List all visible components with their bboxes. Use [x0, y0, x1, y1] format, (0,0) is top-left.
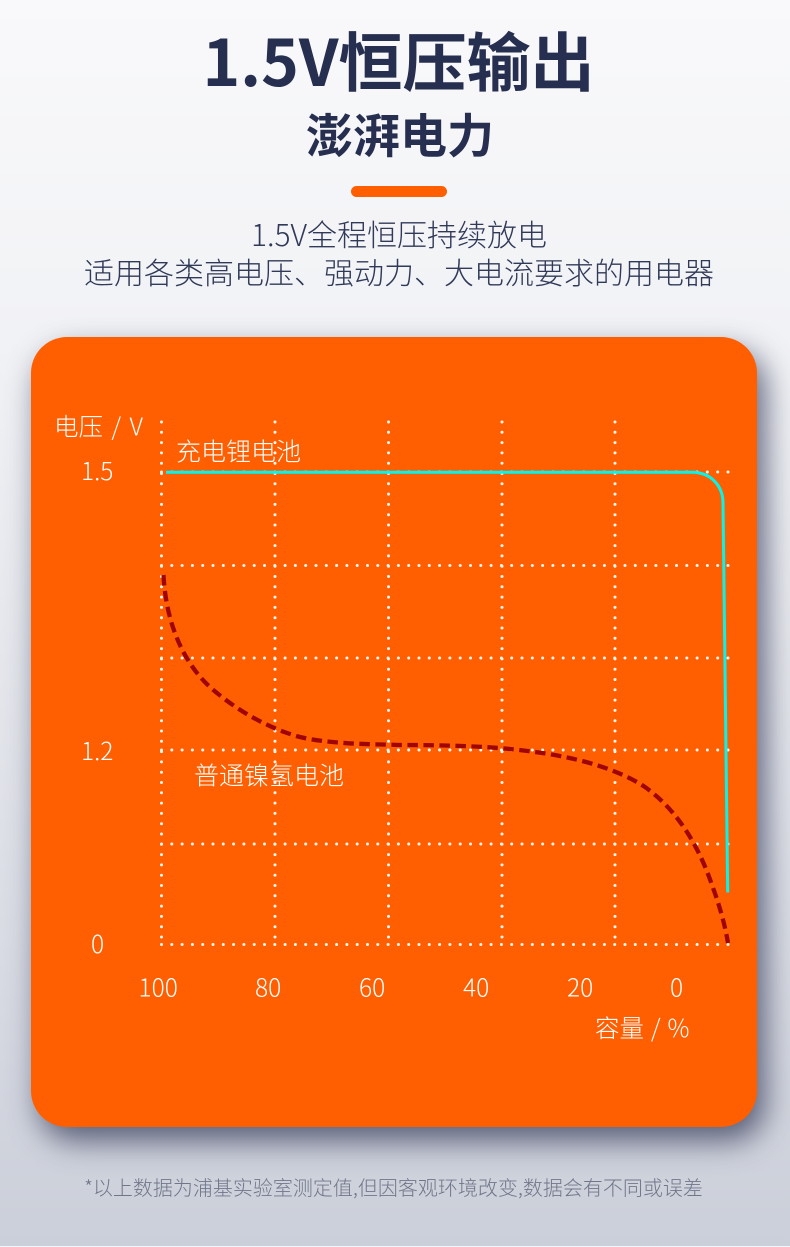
y axis labels: 1.5	[81, 453, 113, 488]
subtitle: 澎湃电力	[306, 98, 494, 166]
x axis labels: 80	[255, 970, 281, 1004]
y axis labels: 1.2	[81, 733, 113, 768]
bottom edge	[0, 1246, 790, 1247]
x axis title: 容量 / %	[595, 1010, 689, 1045]
y axis title: 电压 / V	[54, 408, 143, 444]
description text: 适用各类高电压、强动力、大电流要求的用电器	[84, 248, 714, 292]
x axis labels: 60	[359, 970, 385, 1004]
footnote: *以上数据为浦基实验室测定值,但因客观环境改变,数据会有不同或误差	[84, 1172, 703, 1201]
y axis labels	[81, 453, 113, 961]
accent bar	[351, 186, 447, 197]
x axis labels	[138, 970, 683, 1004]
x axis labels: 100	[138, 970, 178, 1004]
lithium curve	[166, 472, 728, 892]
title: 1.5V恒压输出	[203, 13, 594, 105]
x axis labels: 20	[567, 970, 593, 1004]
lithium label: 充电锂电池	[176, 432, 301, 468]
y axis labels: 0	[91, 926, 104, 961]
description text: 1.5V全程恒压持续放电	[251, 210, 547, 254]
x axis labels: 0	[670, 970, 683, 1004]
NiMH label: 普通镍氢电池	[194, 756, 344, 792]
x axis labels: 40	[463, 970, 489, 1004]
description text	[84, 210, 714, 292]
panel: chart	[31, 337, 757, 1127]
NiMH curve	[164, 575, 728, 943]
